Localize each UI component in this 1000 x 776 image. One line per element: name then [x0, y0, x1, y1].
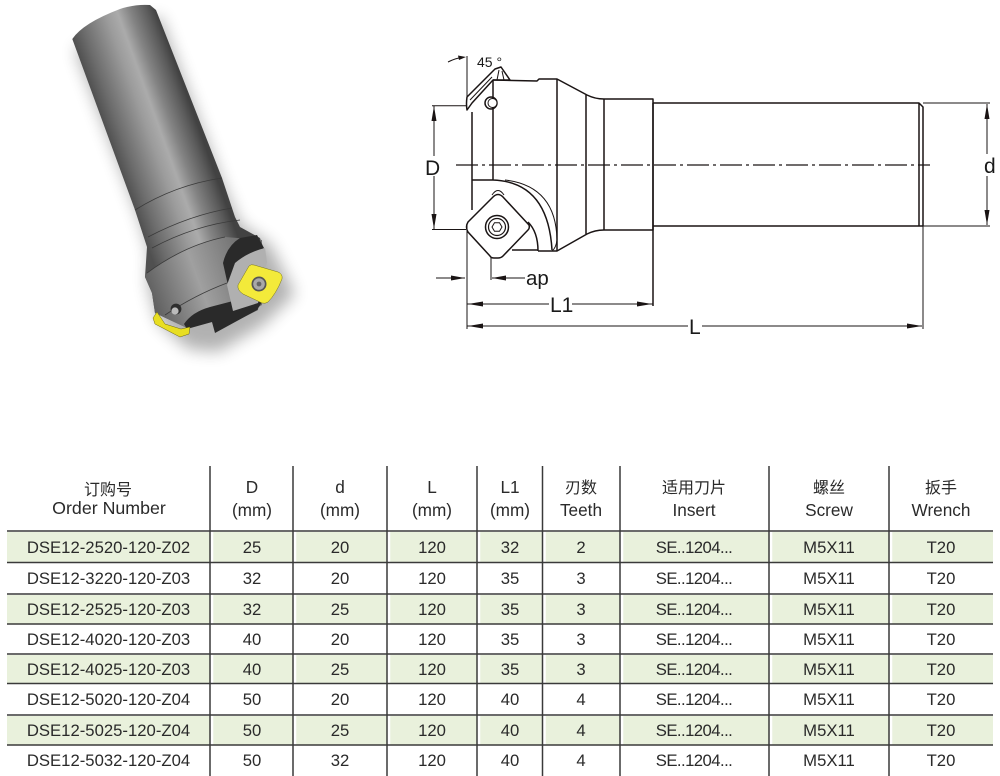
row 6: 40: [501, 690, 519, 709]
row 6: T20: [927, 690, 955, 709]
centre line: [456, 164, 930, 166]
row 2: DSE12-3220-120-Z03: [27, 569, 190, 588]
table header: 刃数: [565, 479, 597, 497]
dimension ap: [436, 258, 549, 290]
table header: [52, 477, 970, 520]
table header: Teeth: [560, 500, 602, 520]
dark underside face: [184, 301, 262, 333]
row 7: 25: [331, 721, 349, 740]
specification table: [7, 466, 993, 776]
technical drawing: [425, 54, 996, 339]
row 3: 25: [331, 600, 349, 619]
row 5: 35: [501, 660, 519, 679]
row 6: DSE12-5020-120-Z04: [27, 690, 190, 709]
angle mark 45 degrees: [448, 54, 502, 97]
shank: [653, 103, 923, 226]
table header: (mm): [232, 500, 272, 520]
top insert with 45 degree chamfer: [466, 67, 510, 110]
row 4: 35: [501, 630, 519, 649]
row 1: 25: [243, 538, 261, 557]
dimension D: [425, 106, 467, 230]
table header: 订购号: [84, 481, 132, 499]
row 5: DSE12-4025-120-Z03: [27, 660, 190, 679]
row 3: M5X11: [803, 600, 855, 619]
row 6: M5X11: [803, 690, 855, 709]
row 7: 120: [418, 721, 446, 740]
row 5: 40: [243, 660, 261, 679]
lower insert: [466, 190, 529, 258]
row 8: [27, 751, 955, 770]
row 3: SE..1204...: [656, 600, 732, 619]
row 7: DSE12-5025-120-Z04: [27, 721, 190, 740]
row 4: 3: [576, 630, 586, 649]
row 1: 120: [418, 538, 446, 557]
row 3: 32: [243, 600, 261, 619]
table header: Wrench: [912, 500, 970, 520]
table header: d: [335, 477, 345, 497]
tool body outline: [472, 79, 653, 306]
row 8: DSE12-5032-120-Z04: [27, 751, 190, 770]
row 6: 20: [331, 690, 349, 709]
row 7: T20: [927, 721, 955, 740]
table header: 扳手: [925, 478, 957, 497]
cutter shank and collar: [72, 5, 264, 332]
green row bands: [7, 532, 993, 745]
row 4: T20: [927, 630, 955, 649]
dark pocket: [223, 235, 264, 290]
table header: 适用刀片: [662, 479, 726, 497]
row 1: DSE12-2520-120-Z02: [27, 538, 190, 557]
row 8: 120: [418, 751, 446, 770]
row 3: T20: [927, 600, 955, 619]
row 2: [27, 569, 955, 588]
row 5: 3: [576, 660, 586, 679]
row 8: 50: [243, 751, 261, 770]
table header: (mm): [412, 500, 452, 520]
row 3: 35: [501, 600, 519, 619]
row 5: T20: [927, 660, 955, 679]
dimension D: D: [425, 157, 440, 180]
table header: (mm): [320, 500, 360, 520]
row 6: 120: [418, 690, 446, 709]
row 7: M5X11: [803, 721, 855, 740]
row 5: [27, 660, 955, 679]
row 4: [27, 630, 955, 649]
grey insert seat: [227, 248, 267, 311]
row 8: 32: [331, 751, 349, 770]
cutter head: [145, 237, 262, 332]
row 2: 120: [418, 569, 446, 588]
table header: L: [427, 477, 437, 497]
product photo: milling cutter: [72, 5, 295, 352]
row 8: 40: [501, 751, 519, 770]
table header: (mm): [490, 500, 530, 520]
row 6: 4: [576, 690, 586, 709]
dimension L: L: [689, 316, 701, 339]
drop shadow: [75, 16, 295, 352]
table header: Screw: [805, 500, 853, 520]
column gaps: [212, 532, 890, 775]
table header: L1: [500, 477, 520, 497]
row 7: 40: [501, 721, 519, 740]
row 1: 20: [331, 538, 349, 557]
row 7: 50: [243, 721, 261, 740]
row 5: 25: [331, 660, 349, 679]
row 1: [27, 538, 955, 557]
row 5: 120: [418, 660, 446, 679]
row 2: SE..1204...: [656, 569, 732, 588]
row 4: SE..1204...: [656, 630, 732, 649]
row 8: 4: [576, 751, 586, 770]
lower yellow insert: [153, 312, 190, 337]
table header: Order Number: [52, 498, 166, 518]
dimension L1: [467, 294, 653, 317]
dimension L: [467, 225, 923, 339]
row 3: [27, 600, 955, 619]
row 6: SE..1204...: [656, 690, 732, 709]
table rules: [7, 466, 993, 776]
row 5: SE..1204...: [656, 660, 732, 679]
dimension d: [923, 103, 996, 226]
row 3: DSE12-2525-120-Z03: [27, 600, 190, 619]
row 8: M5X11: [803, 751, 855, 770]
dimension L1: L1: [550, 294, 573, 317]
row 4: 40: [243, 630, 261, 649]
row 7: 4: [576, 721, 586, 740]
row 2: 35: [501, 569, 519, 588]
row 1: M5X11: [803, 538, 855, 557]
row 4: M5X11: [803, 630, 855, 649]
row 7: [27, 721, 955, 740]
coolant hole: [171, 304, 181, 315]
yellow insert: [238, 265, 282, 303]
row 2: M5X11: [803, 569, 855, 588]
row 5: M5X11: [803, 660, 855, 679]
angle mark 45 degrees: 45 °: [477, 54, 502, 70]
row 4: 20: [331, 630, 349, 649]
row 8: SE..1204...: [656, 751, 732, 770]
row 8: T20: [927, 751, 955, 770]
row 1: SE..1204...: [656, 538, 732, 557]
groove lines: [135, 178, 240, 315]
row 1: 2: [576, 538, 586, 557]
row 3: 3: [576, 600, 586, 619]
dimension ap: ap: [526, 267, 549, 290]
row 6: [27, 690, 955, 709]
row 3: 120: [418, 600, 446, 619]
row 2: 3: [576, 569, 586, 588]
row 4: 120: [418, 630, 446, 649]
row 1: 32: [501, 538, 519, 557]
table header: 螺丝: [813, 479, 845, 497]
row 4: DSE12-4020-120-Z03: [27, 630, 190, 649]
row 7: SE..1204...: [656, 721, 732, 740]
insert screw: [252, 276, 266, 292]
row 2: T20: [927, 569, 955, 588]
row 1: T20: [927, 538, 955, 557]
dimension d: d: [984, 155, 996, 178]
row 2: 32: [243, 569, 261, 588]
table header: Insert: [672, 500, 716, 520]
table header: D: [246, 477, 258, 497]
row 6: 50: [243, 690, 261, 709]
row 2: 20: [331, 569, 349, 588]
